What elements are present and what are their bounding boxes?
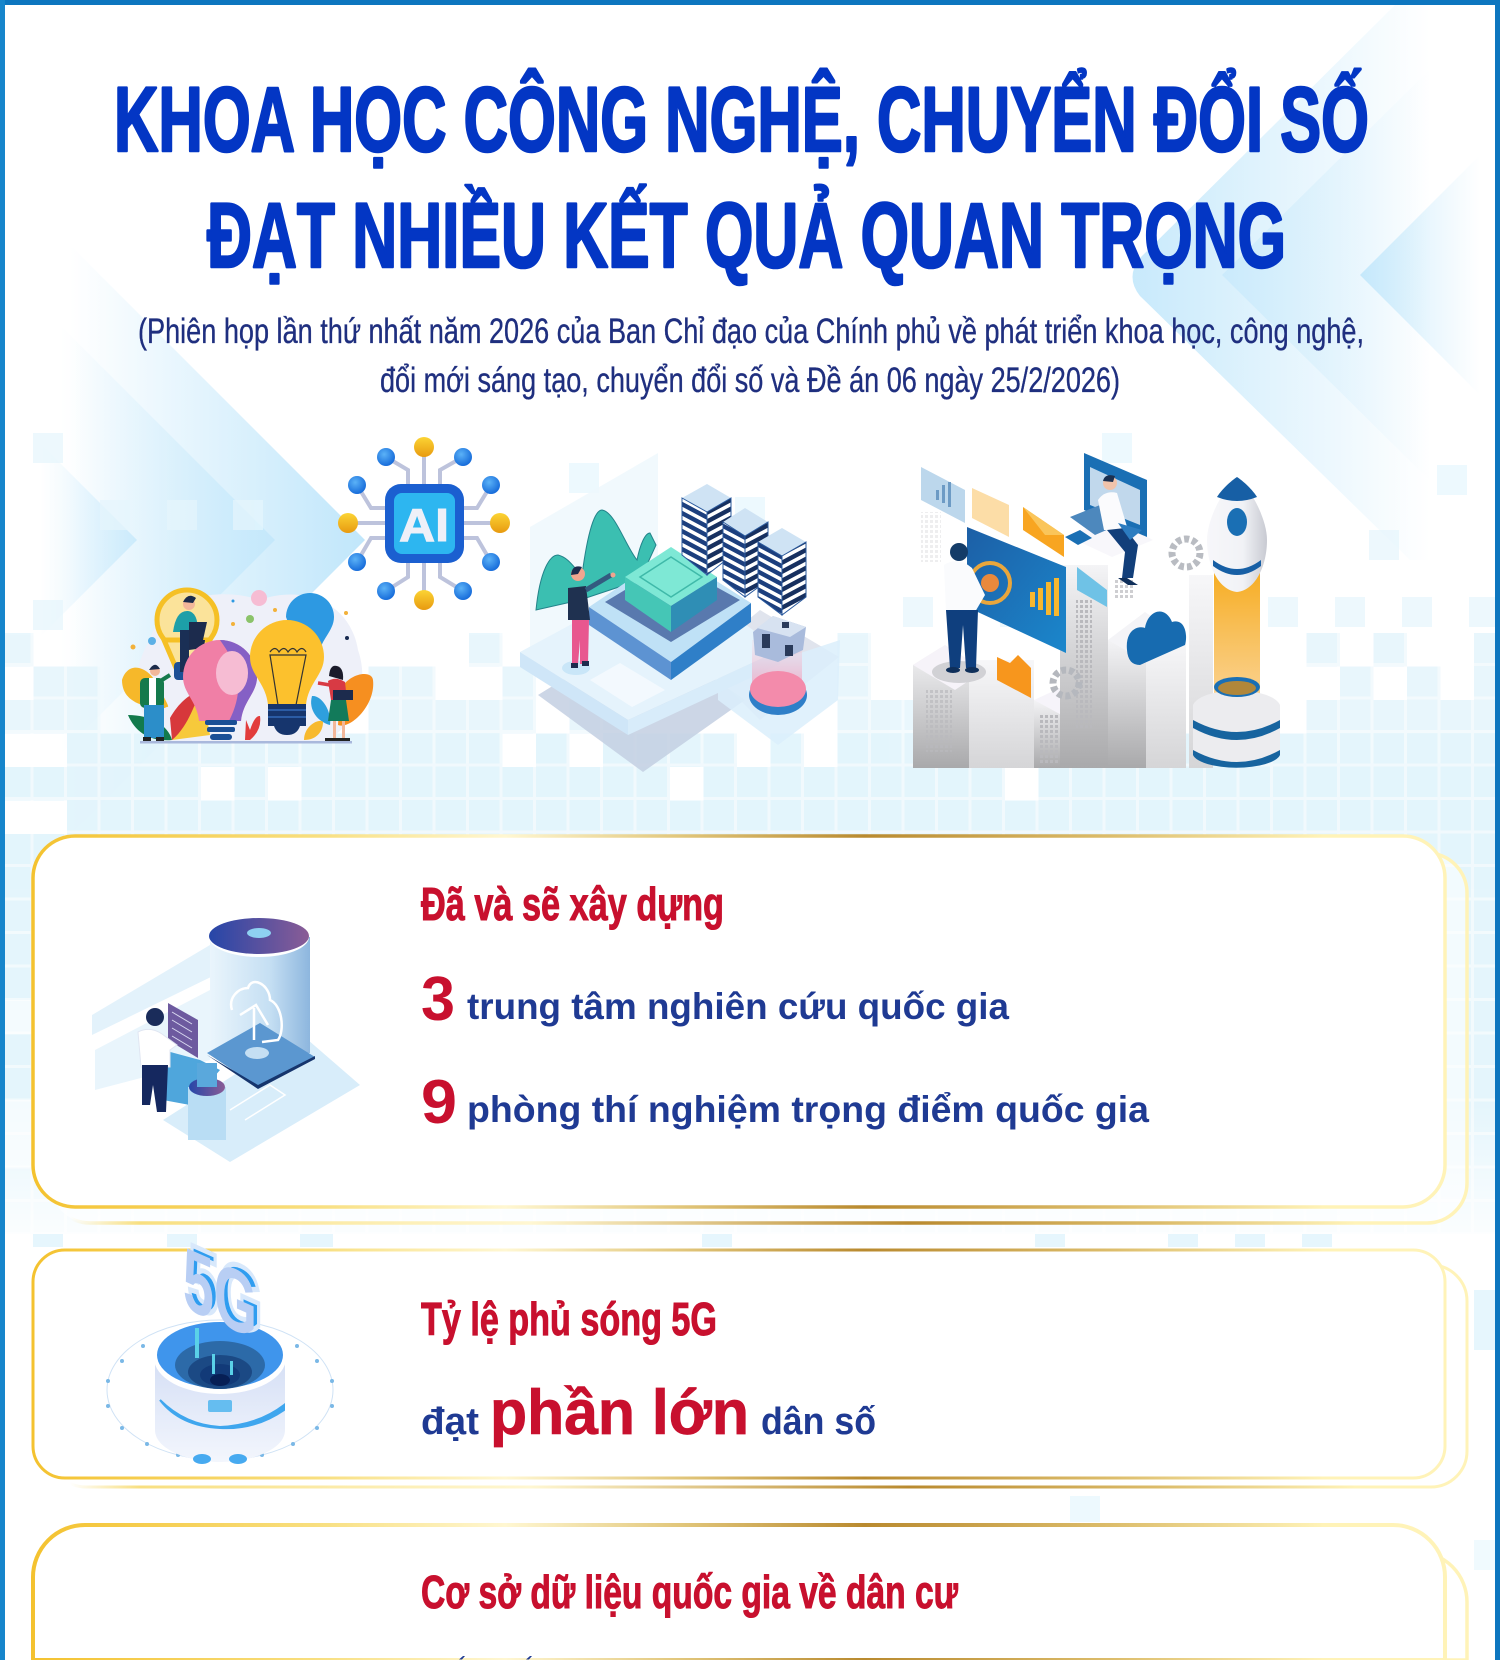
illustration: light bulbs and people <box>122 590 373 744</box>
icon: AI chip: AI <box>399 499 449 551</box>
icon: AI chip <box>338 437 510 610</box>
icon: 5G station: 5G <box>188 1224 262 1356</box>
illustration: data cylinder and engineer <box>92 917 360 1162</box>
panel: 5G coverage <box>33 1224 1467 1487</box>
panel: national population database <box>33 1525 1467 1660</box>
subtitle: đổi mới sáng tạo, chuyển đổi số và Đề án 06 ngày 25/2/2026) <box>380 361 1120 400</box>
partial next line <box>459 1656 532 1660</box>
panel: research centres <box>33 836 1467 1223</box>
illustration: isometric chip and data servers <box>520 453 840 772</box>
stat: 3 research centres: 3 <box>421 965 455 1034</box>
stat: coverage majority <box>421 1378 876 1448</box>
heading: Tỷ lệ phủ sóng 5G <box>421 1293 717 1345</box>
icon: 5G station <box>106 1224 334 1464</box>
heading: Cơ sở dữ liệu quốc gia về dân cư <box>421 1566 959 1618</box>
stat: 3 research centres: trung tâm nghiên cứu quốc gia <box>467 986 1009 1027</box>
stat: 9 laboratories: 9 <box>421 1068 457 1137</box>
stat: coverage majority: dân số <box>761 1401 876 1443</box>
illustration: cloud rocket and digital city <box>913 453 1280 768</box>
stat: coverage majority: phần lớn <box>490 1378 749 1448</box>
title <box>114 67 1369 287</box>
stat: coverage majority: đạt <box>421 1401 479 1443</box>
subtitle <box>138 312 1364 400</box>
stat: 9 laboratories <box>421 1068 1149 1137</box>
stat: 3 research centres <box>421 965 1009 1034</box>
icon: 5G station: 5G <box>183 1227 257 1359</box>
stat: 9 laboratories: phòng thí nghiệm trọng điểm quốc gia <box>467 1089 1149 1130</box>
heading: Đã và sẽ xây dựng <box>421 878 724 930</box>
